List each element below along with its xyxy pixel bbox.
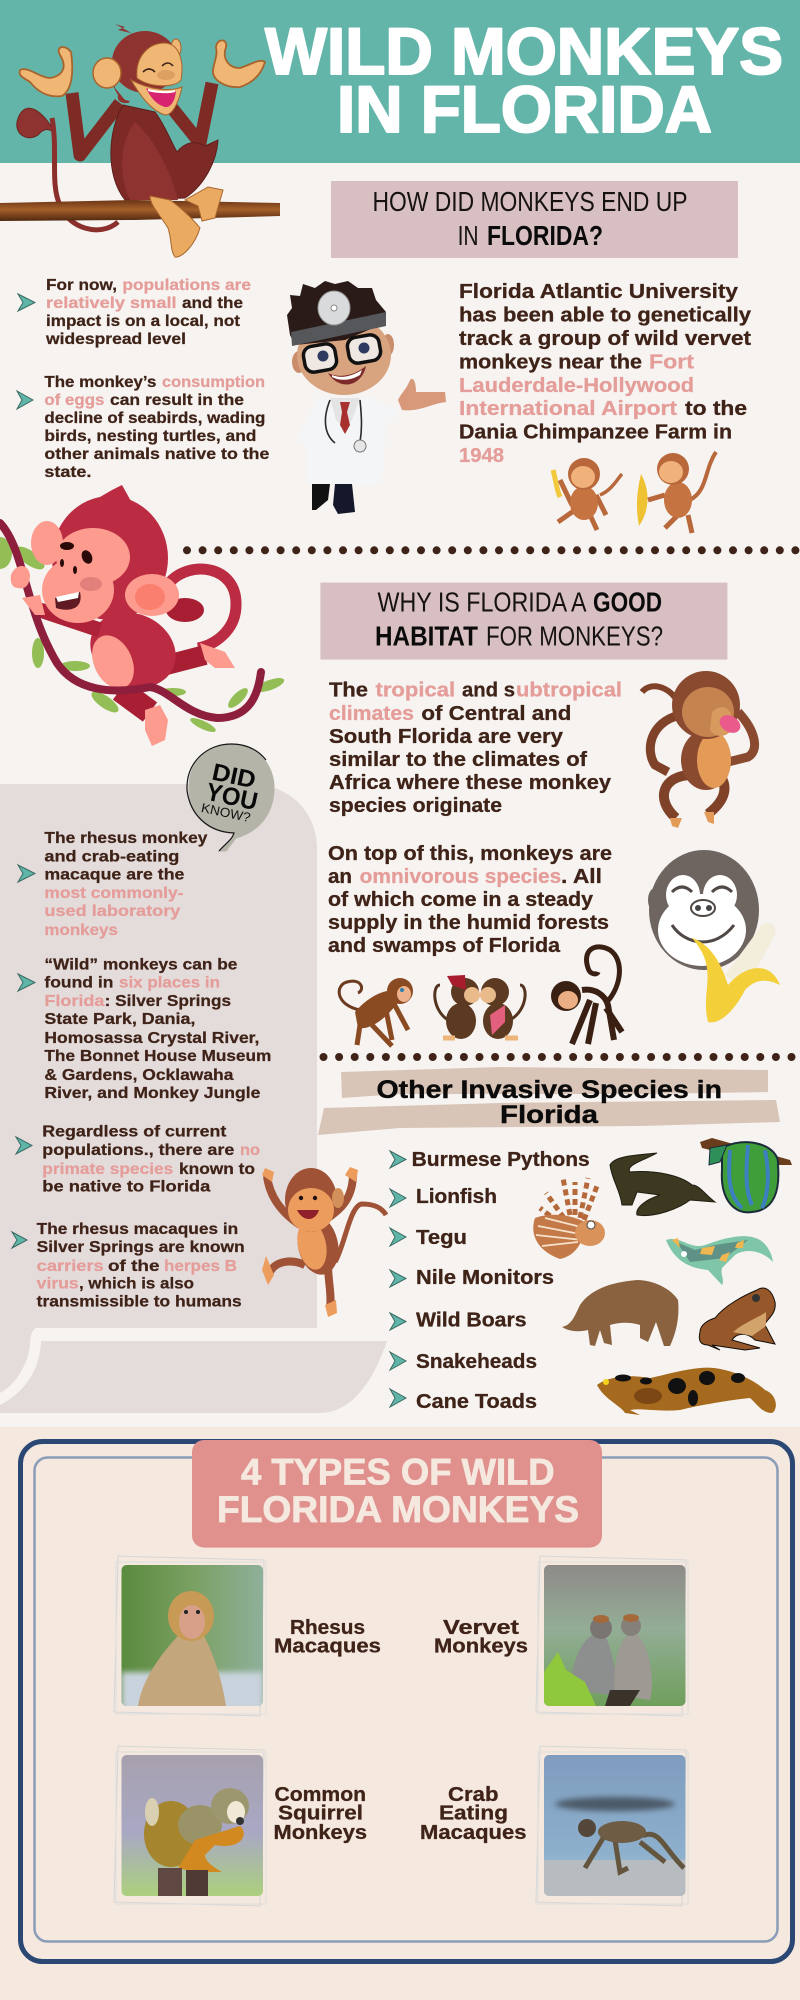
fact: six places in Florida: The Bonnet House Museum	[44, 1048, 271, 1065]
text block: climates: of Central and	[421, 703, 571, 725]
monkey: black long tailed	[551, 947, 622, 1044]
text block: climates: similar to the climates of	[329, 749, 587, 771]
text block: climates: The	[329, 680, 368, 702]
fact: laboratory monkeys: most commonly-	[44, 885, 183, 902]
icon: arrow	[18, 865, 35, 882]
divider dots	[187, 546, 800, 554]
icon: arrow	[16, 1137, 32, 1154]
fact: populations small: For now,	[46, 277, 117, 294]
text block: genetic tracking: Dania Chimpanzee Farm in	[459, 421, 732, 443]
illustration: monkeys with bananas	[553, 452, 716, 533]
illustration: python	[700, 1138, 792, 1212]
fact: consumption of eggs: consumption	[162, 374, 265, 391]
illustration: cane toad	[699, 1288, 775, 1350]
heading: 4 types of wild Florida monkeys: 4 TYPES OF WILD	[241, 1452, 555, 1493]
text block: climates: South Florida are very	[329, 726, 564, 748]
label: common squirrel monkeys: Monkeys	[274, 1822, 367, 1844]
section heading: how did monkeys end up in Florida: IN	[458, 220, 479, 251]
text block: genetic tracking: to the	[685, 398, 747, 420]
illustration: cartoon doctor	[287, 281, 446, 514]
fact: no native primates	[16, 1124, 260, 1196]
label: vervet monkeys: Vervet	[443, 1617, 519, 1639]
badge: did you know: DID	[210, 759, 258, 794]
monkey: brown walking	[339, 978, 413, 1046]
illustration: boar	[562, 1280, 678, 1346]
panel: curved lower background	[0, 1328, 387, 1413]
list: invasive species: Wild Boars	[416, 1310, 526, 1332]
text block: omnivorous	[328, 843, 612, 957]
fact: herpes B virus: of the	[108, 1258, 160, 1275]
label: crab eating macaques: Eating	[439, 1803, 508, 1825]
fact: six places in Florida: “Wild” monkeys can be	[44, 956, 238, 974]
illustration: dancing monkey	[262, 1167, 386, 1317]
fact: six places in Florida: Florida	[44, 993, 105, 1010]
illustration: three small monkeys	[339, 947, 622, 1046]
label: rhesus macaques: Macaques	[274, 1635, 381, 1657]
icon: arrow	[18, 974, 35, 991]
list: invasive species: Snakeheads	[416, 1351, 537, 1373]
illustration: laughing monkey on a branch	[0, 24, 280, 257]
fact: populations small: impact is on a local, not	[46, 313, 241, 330]
fact: consumption of eggs: state.	[44, 464, 91, 481]
text block: climates: climates	[329, 703, 414, 725]
text block: climates: species originate	[329, 795, 502, 817]
badge: did you know: KNOW?	[200, 800, 252, 825]
label: crab eating macaques	[420, 1784, 526, 1844]
illustration: tegu	[666, 1236, 773, 1285]
fact: herpes B virus: Silver Springs are known	[37, 1239, 245, 1256]
section heading: other invasive species: Florida	[500, 1101, 599, 1129]
panel: inner border	[34, 1458, 778, 1942]
text block: omnivorous: of which come in a steady	[328, 889, 594, 911]
section heading: why is Florida a good habitat: WHY IS FLORIDA A	[378, 587, 587, 618]
monkey: kissing pair	[435, 975, 525, 1039]
label: common squirrel monkeys: Common	[274, 1784, 366, 1806]
text block: climates: Africa where these monkey	[329, 772, 612, 794]
fact: six places in Florida: : Silver Springs	[105, 993, 231, 1010]
fact: consumption of eggs: other animals native to the	[44, 446, 270, 463]
photo: vervet monkeys	[536, 1556, 688, 1716]
text block: genetic tracking	[459, 281, 752, 467]
fact: populations small: and the	[182, 295, 243, 312]
fact: no native primates: be native to Florida	[42, 1179, 210, 1196]
text block: genetic tracking: Florida Atlantic University	[459, 281, 739, 303]
text block: omnivorous: omnivorous species	[360, 866, 561, 888]
fact: no native primates: no	[240, 1142, 260, 1159]
icon: arrow	[17, 391, 33, 409]
fact: laboratory monkeys	[18, 830, 208, 939]
section heading: other invasive species: Other Invasive Species in	[376, 1076, 722, 1104]
label: vervet monkeys	[434, 1617, 528, 1657]
section heading: why is Florida a good habitat	[320, 583, 727, 660]
text block: genetic tracking: monkeys near the	[459, 351, 642, 373]
illustration: grey monkey with banana	[648, 850, 780, 1022]
fact: herpes B virus: , which is also	[79, 1276, 194, 1293]
icon: arrow	[18, 294, 35, 311]
fact: no native primates: Regardless of current	[42, 1124, 227, 1141]
fact: six places in Florida: River, and Monkey Jungle	[44, 1085, 261, 1102]
fact: no native primates: populations., there are	[42, 1142, 234, 1159]
fact: laboratory monkeys: used laboratory	[44, 903, 181, 920]
icon: arrow	[12, 1232, 27, 1248]
fact: populations small	[18, 277, 251, 348]
text block: omnivorous: and swamps of Florida	[328, 935, 561, 957]
label: crab eating macaques: Crab	[448, 1784, 498, 1806]
fact: six places in Florida: found in	[44, 974, 113, 991]
text block: climates: tropical	[376, 680, 455, 702]
panel: did you know background	[0, 784, 317, 1328]
section heading: why is Florida a good habitat: GOOD	[593, 587, 662, 618]
panel: four types background	[0, 1427, 800, 2000]
text block: omnivorous: On top of this, monkeys are	[328, 843, 612, 865]
fact: six places in Florida: six places in	[119, 974, 220, 991]
badge: did you know: YOU	[203, 778, 260, 816]
fact: consumption of eggs: decline of seabirds, wading	[44, 410, 265, 427]
section heading: why is Florida a good habitat: HABITAT	[375, 621, 478, 652]
fact: herpes B virus: herpes B	[164, 1258, 237, 1275]
fact: herpes B virus: The rhesus macaques in	[37, 1221, 238, 1238]
label: rhesus macaques: Rhesus	[290, 1617, 365, 1639]
fact: populations small: relatively small	[46, 295, 177, 312]
fact: six places in Florida: & Gardens, Ocklawaha	[44, 1067, 234, 1084]
fact: laboratory monkeys: monkeys	[44, 922, 118, 939]
text block: genetic tracking: Fort	[649, 351, 694, 373]
section heading: how did monkeys end up in Florida	[331, 181, 738, 258]
text block: genetic tracking: Lauderdale-Hollywood	[459, 375, 694, 397]
list: invasive species: Lionfish	[416, 1186, 497, 1208]
divider dots	[324, 1053, 800, 1061]
list: invasive species: Nile Monitors	[416, 1267, 554, 1289]
text block: climates: and s	[462, 680, 515, 702]
fact: consumption of eggs: can result in the	[110, 392, 244, 409]
list: invasive species: Cane Toads	[416, 1391, 537, 1413]
list: invasive species: Burmese Pythons	[412, 1149, 590, 1171]
section heading: why is Florida a good habitat: FOR MONKEYS?	[486, 621, 663, 652]
photo: crab eating macaque	[536, 1746, 688, 1906]
text block: omnivorous: . All	[561, 866, 602, 888]
text block: genetic tracking: 1948	[459, 445, 504, 467]
text block: climates	[329, 680, 622, 817]
heading: 4 types of wild Florida monkeys	[192, 1440, 602, 1548]
fact: herpes B virus	[12, 1221, 245, 1311]
section heading: other invasive species	[318, 1067, 780, 1135]
list: invasive species	[390, 1149, 590, 1413]
fact: laboratory monkeys: macaque are the	[44, 866, 185, 883]
illustration: monkey sticking out tongue	[642, 671, 755, 828]
text block: omnivorous: an	[328, 866, 352, 888]
list: invasive species: Tegu	[416, 1227, 467, 1249]
label: rhesus macaques	[274, 1617, 381, 1657]
text block: genetic tracking: has been able to genetically	[459, 305, 752, 327]
fact: herpes B virus: virus	[37, 1276, 79, 1293]
illustration: snakehead fish	[597, 1368, 776, 1415]
title banner	[0, 0, 800, 163]
fact: six places in Florida: State Park, Dania,	[44, 1011, 195, 1028]
title: WILD MONKEYS	[265, 14, 783, 88]
text block: genetic tracking: International Airport	[459, 398, 677, 420]
fact: consumption of eggs: of eggs	[44, 392, 105, 409]
label: crab eating macaques: Macaques	[420, 1822, 526, 1844]
label: common squirrel monkeys	[274, 1784, 367, 1844]
title: IN FLORIDA	[337, 72, 712, 146]
section heading: how did monkeys end up in Florida: FLORIDA?	[487, 220, 603, 251]
text block: genetic tracking: track a group of wild vervet	[459, 328, 751, 350]
panel: outer border	[20, 1442, 792, 1962]
text block: climates: ubtropical	[516, 680, 622, 702]
fact: herpes B virus: transmissible to humans	[37, 1294, 242, 1311]
illustration: lionfish	[533, 1178, 605, 1259]
text block: omnivorous: supply in the humid forests	[328, 912, 609, 934]
fact: no native primates: known to	[179, 1161, 255, 1178]
heading: 4 types of wild Florida monkeys: FLORIDA MONKEYS	[217, 1489, 579, 1530]
photo: common squirrel monkey	[114, 1746, 266, 1906]
section heading: how did monkeys end up in Florida: HOW DID MONKEYS END UP	[372, 186, 688, 217]
fact: populations small: populations are	[122, 277, 251, 294]
fact: consumption of eggs	[17, 374, 270, 481]
illustration: alligator	[610, 1153, 715, 1216]
badge: did you know	[187, 744, 274, 851]
fact: six places in Florida	[18, 956, 271, 1102]
fact: no native primates: primate species	[42, 1161, 173, 1178]
illustration: red monkey swinging on a vine	[0, 485, 286, 746]
fact: consumption of eggs: The monkey’s	[44, 374, 157, 391]
photo: rhesus macaque	[114, 1556, 266, 1716]
fact: herpes B virus: carriers	[37, 1258, 104, 1275]
label: vervet monkeys: Monkeys	[434, 1635, 528, 1657]
fact: laboratory monkeys: The rhesus monkey	[44, 830, 208, 847]
fact: six places in Florida: Homosassa Crystal River,	[44, 1030, 259, 1047]
fact: laboratory monkeys: and crab-eating	[44, 848, 179, 866]
fact: consumption of eggs: birds, nesting turtles, and	[44, 428, 256, 445]
title	[265, 14, 783, 146]
label: common squirrel monkeys: Squirrel	[278, 1803, 363, 1825]
fact: populations small: widespread level	[45, 331, 186, 348]
